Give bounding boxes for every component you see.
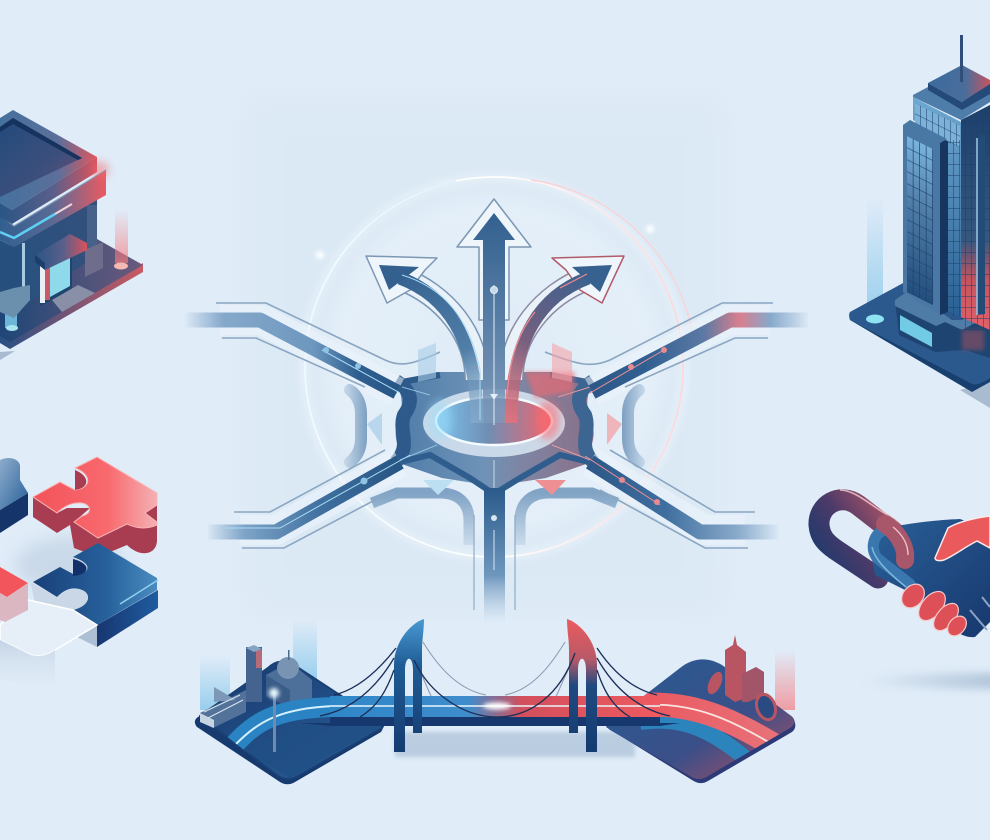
right tower [567,619,597,752]
arrow: right [507,256,624,423]
glow columns [200,620,795,710]
icon: chain link and handshake [819,490,990,689]
left road [233,688,335,752]
roof [0,110,109,224]
blue small piece [0,458,28,533]
red hand [935,516,990,561]
shadow [860,673,990,689]
link: blue [872,524,910,587]
deck [300,696,680,726]
center ellipse [423,389,565,457]
main cables [320,648,670,717]
left city buildings [200,645,312,728]
road: lower right [585,450,782,548]
background glow panels [250,100,720,610]
arrow: left [366,256,480,423]
red small piece [0,567,28,622]
halo circle [302,175,693,559]
soft shadow [15,537,125,593]
glow column [867,197,883,319]
red and blue glow around hub [418,343,575,398]
hub [396,372,594,495]
blue hand [870,519,990,637]
blue piece [33,543,158,647]
cornice [0,170,106,247]
road: bottom stem [474,488,515,623]
left platform [195,662,383,784]
side brackets [350,390,639,545]
roof [913,65,990,120]
road: upper left [184,303,440,393]
shadow [960,382,990,408]
small direction markers [367,413,622,495]
platform [849,282,990,392]
doorway and awning [35,234,95,312]
link: dark and red [819,490,908,578]
right city buildings [704,635,779,722]
narrow center face [913,97,961,317]
ground shadow [395,732,635,757]
antenna [960,35,963,82]
icon: skyscraper [849,35,990,408]
base [895,293,990,358]
central road junction diagram [184,175,808,623]
icon: jigsaw puzzle [0,457,158,690]
back tower legs [405,659,413,700]
arrow: up [457,199,531,425]
red piece [33,457,157,557]
road: lower left [208,450,410,548]
walls [0,197,103,318]
glass piece [0,583,97,690]
back cables [412,642,576,716]
right platform [606,659,795,783]
glow columns [5,210,128,331]
icon: storefront building [0,110,143,360]
icon: bridge between two cities [195,619,795,784]
left wing [903,120,947,315]
road: upper right [545,303,808,393]
right face [961,105,990,330]
left tower [394,619,424,752]
right road [640,692,780,760]
platform [0,239,143,360]
red fingers [897,580,970,640]
